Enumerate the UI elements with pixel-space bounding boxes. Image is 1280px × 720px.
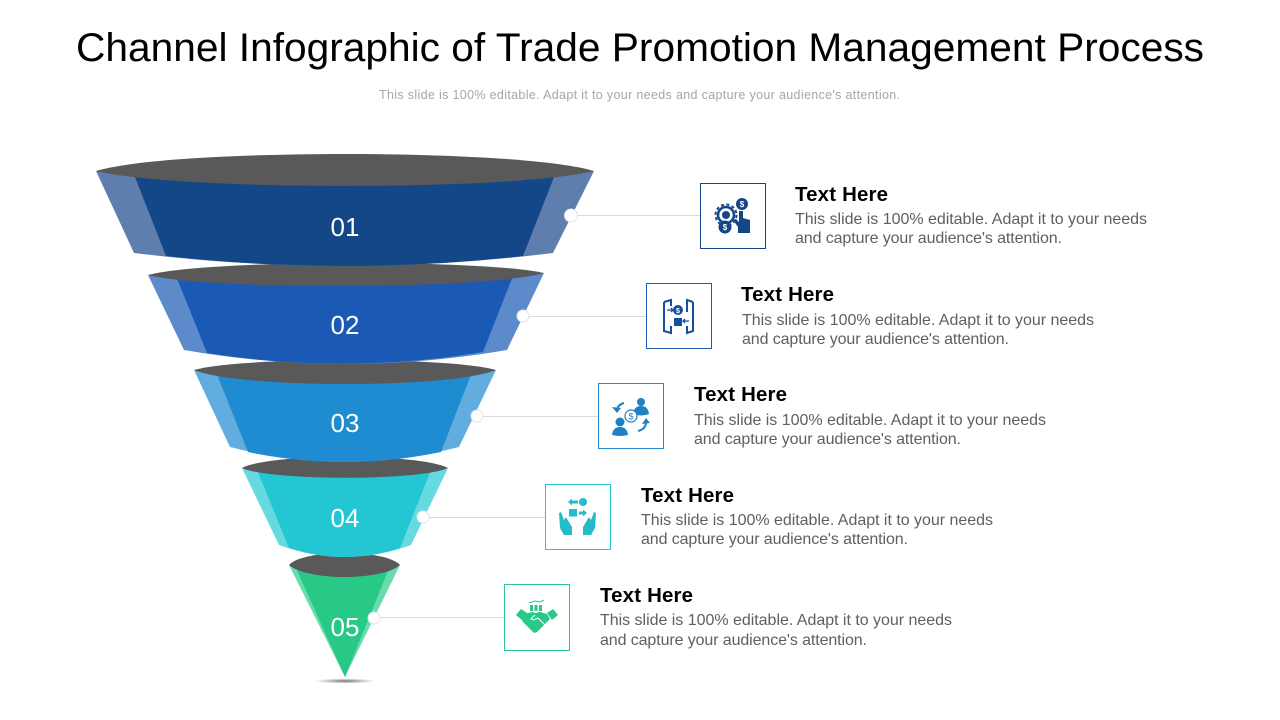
icon box 05: handshake with chart	[504, 584, 570, 650]
icon box 01: gear, coins and hand: $	[723, 223, 728, 232]
connector 05	[368, 612, 504, 624]
text block 04: and capture your audience's attention.	[641, 531, 908, 548]
text block 03: Text Here	[694, 384, 787, 406]
funnel segment 04: 04	[331, 503, 359, 533]
funnel	[96, 154, 594, 684]
funnel segment 05	[289, 553, 400, 677]
icon box 01: gear, coins and hand	[700, 184, 766, 248]
funnel segment 05: 05	[331, 612, 359, 642]
text block 04	[641, 485, 993, 548]
text block 02	[741, 284, 1094, 348]
icon box 03: people exchanging money: $	[628, 412, 634, 422]
apex shadow	[315, 678, 375, 684]
connector 02	[517, 310, 646, 322]
text block 01: Text Here	[795, 184, 888, 206]
text block 04: Text Here	[641, 485, 734, 507]
connector 01	[564, 209, 700, 222]
funnel segment 02: 02	[331, 310, 359, 340]
funnel segment 01	[96, 154, 594, 266]
funnel segment 04	[242, 457, 448, 557]
text block 02: This slide is 100% editable. Adapt it to your needs	[742, 312, 1094, 329]
subtitle: This slide is 100% editable. Adapt it to your needs and capture your audience's attention.	[379, 88, 900, 102]
text block 05: and capture your audience's attention.	[600, 632, 867, 649]
funnel segment 02	[148, 263, 544, 364]
icon box 02: doors, coin and package	[646, 284, 712, 348]
text block 01: This slide is 100% editable. Adapt it to your needs	[795, 211, 1147, 228]
text block 02: and capture your audience's attention.	[742, 331, 1009, 348]
icon box 04: hands with shapes	[546, 484, 610, 550]
text block 03: This slide is 100% editable. Adapt it to your needs	[694, 412, 1046, 429]
title: Channel Infographic of Trade Promotion Management Process	[76, 26, 1204, 70]
text block 01	[795, 184, 1147, 247]
funnel segment 03: 03	[331, 408, 359, 438]
funnel segment 03	[194, 360, 496, 462]
text block 04: This slide is 100% editable. Adapt it to your needs	[641, 512, 993, 529]
icon box 03: people exchanging money	[598, 384, 664, 448]
text block 02: Text Here	[741, 284, 834, 306]
text block 03	[694, 384, 1046, 448]
icon box 01: gear, coins and hand: $	[740, 200, 745, 209]
connector 04	[417, 511, 545, 523]
text block 05: This slide is 100% editable. Adapt it to your needs	[600, 612, 952, 629]
icon box 02: doors, coin and package: $	[676, 308, 680, 315]
connector 03	[471, 410, 598, 422]
text block 05	[600, 585, 952, 649]
text block 05: Text Here	[600, 585, 693, 607]
funnel segment 01: 01	[331, 212, 359, 242]
text block 01: and capture your audience's attention.	[795, 230, 1062, 247]
text block 03: and capture your audience's attention.	[694, 431, 961, 448]
